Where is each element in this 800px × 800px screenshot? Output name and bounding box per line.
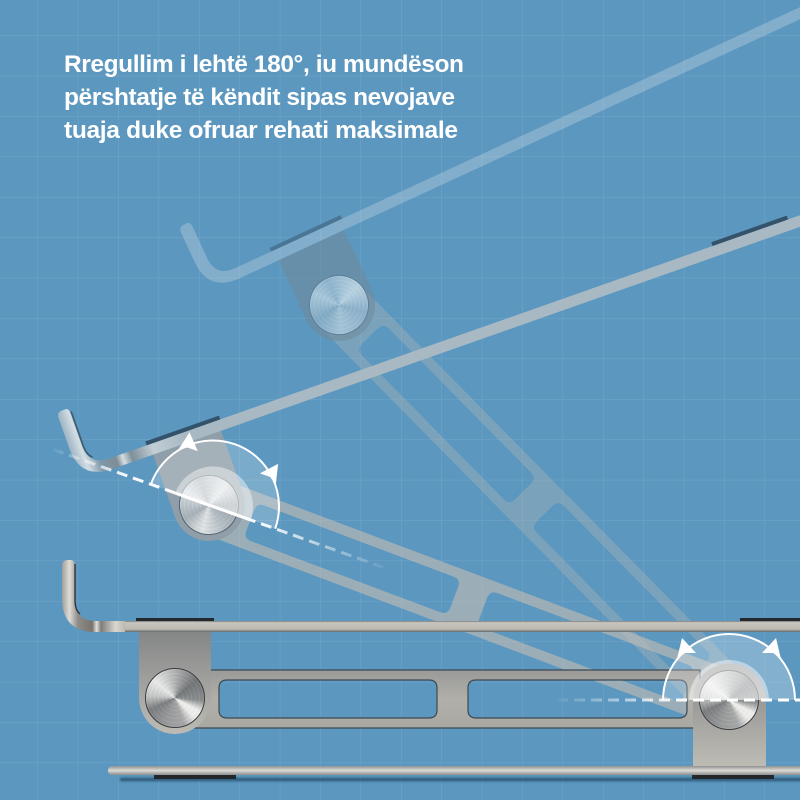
left bracket	[139, 632, 211, 734]
solid centre of reference line	[175, 493, 251, 520]
left pivot disc	[145, 668, 205, 728]
hook back edge	[71, 410, 92, 459]
dashed reference line	[53, 449, 387, 569]
top plate and hook	[57, 68, 800, 480]
pivot disc	[299, 265, 379, 345]
translucent half disc	[663, 634, 795, 700]
arm with slots	[175, 670, 700, 728]
title text	[64, 51, 464, 144]
hook	[62, 560, 130, 632]
top plate	[125, 621, 800, 632]
base shadow	[120, 778, 800, 781]
line 3: tuaja duke ofruar rehati maksimale	[64, 117, 458, 144]
arrowhead right	[258, 459, 283, 485]
halo	[175, 455, 264, 520]
arc	[151, 422, 297, 529]
stand: highest position arm (ghosted)	[318, 285, 759, 731]
base pad left	[154, 775, 236, 779]
rubber pad	[270, 215, 342, 251]
bracket	[153, 431, 255, 551]
arc	[663, 634, 795, 700]
right pivot disc	[699, 670, 759, 730]
top plate and hook	[179, 0, 800, 292]
hook back edge	[75, 564, 80, 614]
arrowhead right	[762, 638, 781, 659]
rubber pad	[145, 416, 220, 445]
arrowhead left	[677, 638, 696, 659]
line 2: përshtatje të këndit sipas nevojave	[64, 84, 455, 111]
base plate	[108, 766, 800, 775]
dashed reference line	[557, 698, 800, 702]
rubber pad left	[136, 618, 214, 621]
halo	[689, 660, 769, 700]
pivot disc	[171, 467, 247, 543]
line 1: Rregullim i lehtë 180°, iu mundëson	[64, 51, 464, 78]
stand: lowest position	[62, 560, 800, 781]
stand: highest position plate (ghosted)	[179, 0, 800, 385]
angle indicator: middle hinge	[53, 387, 409, 569]
translucent half disc	[151, 422, 297, 529]
far rubber pad	[711, 216, 788, 246]
rubber pad right	[740, 618, 800, 621]
right bracket	[693, 664, 766, 766]
angle indicator: lower hinge	[557, 634, 800, 700]
arrowhead left	[178, 431, 203, 457]
stand: middle position plate (ghosted)	[57, 68, 800, 576]
base pad right	[692, 775, 774, 779]
bracket	[279, 230, 387, 353]
stand: middle position arm (ghosted)	[199, 478, 752, 732]
